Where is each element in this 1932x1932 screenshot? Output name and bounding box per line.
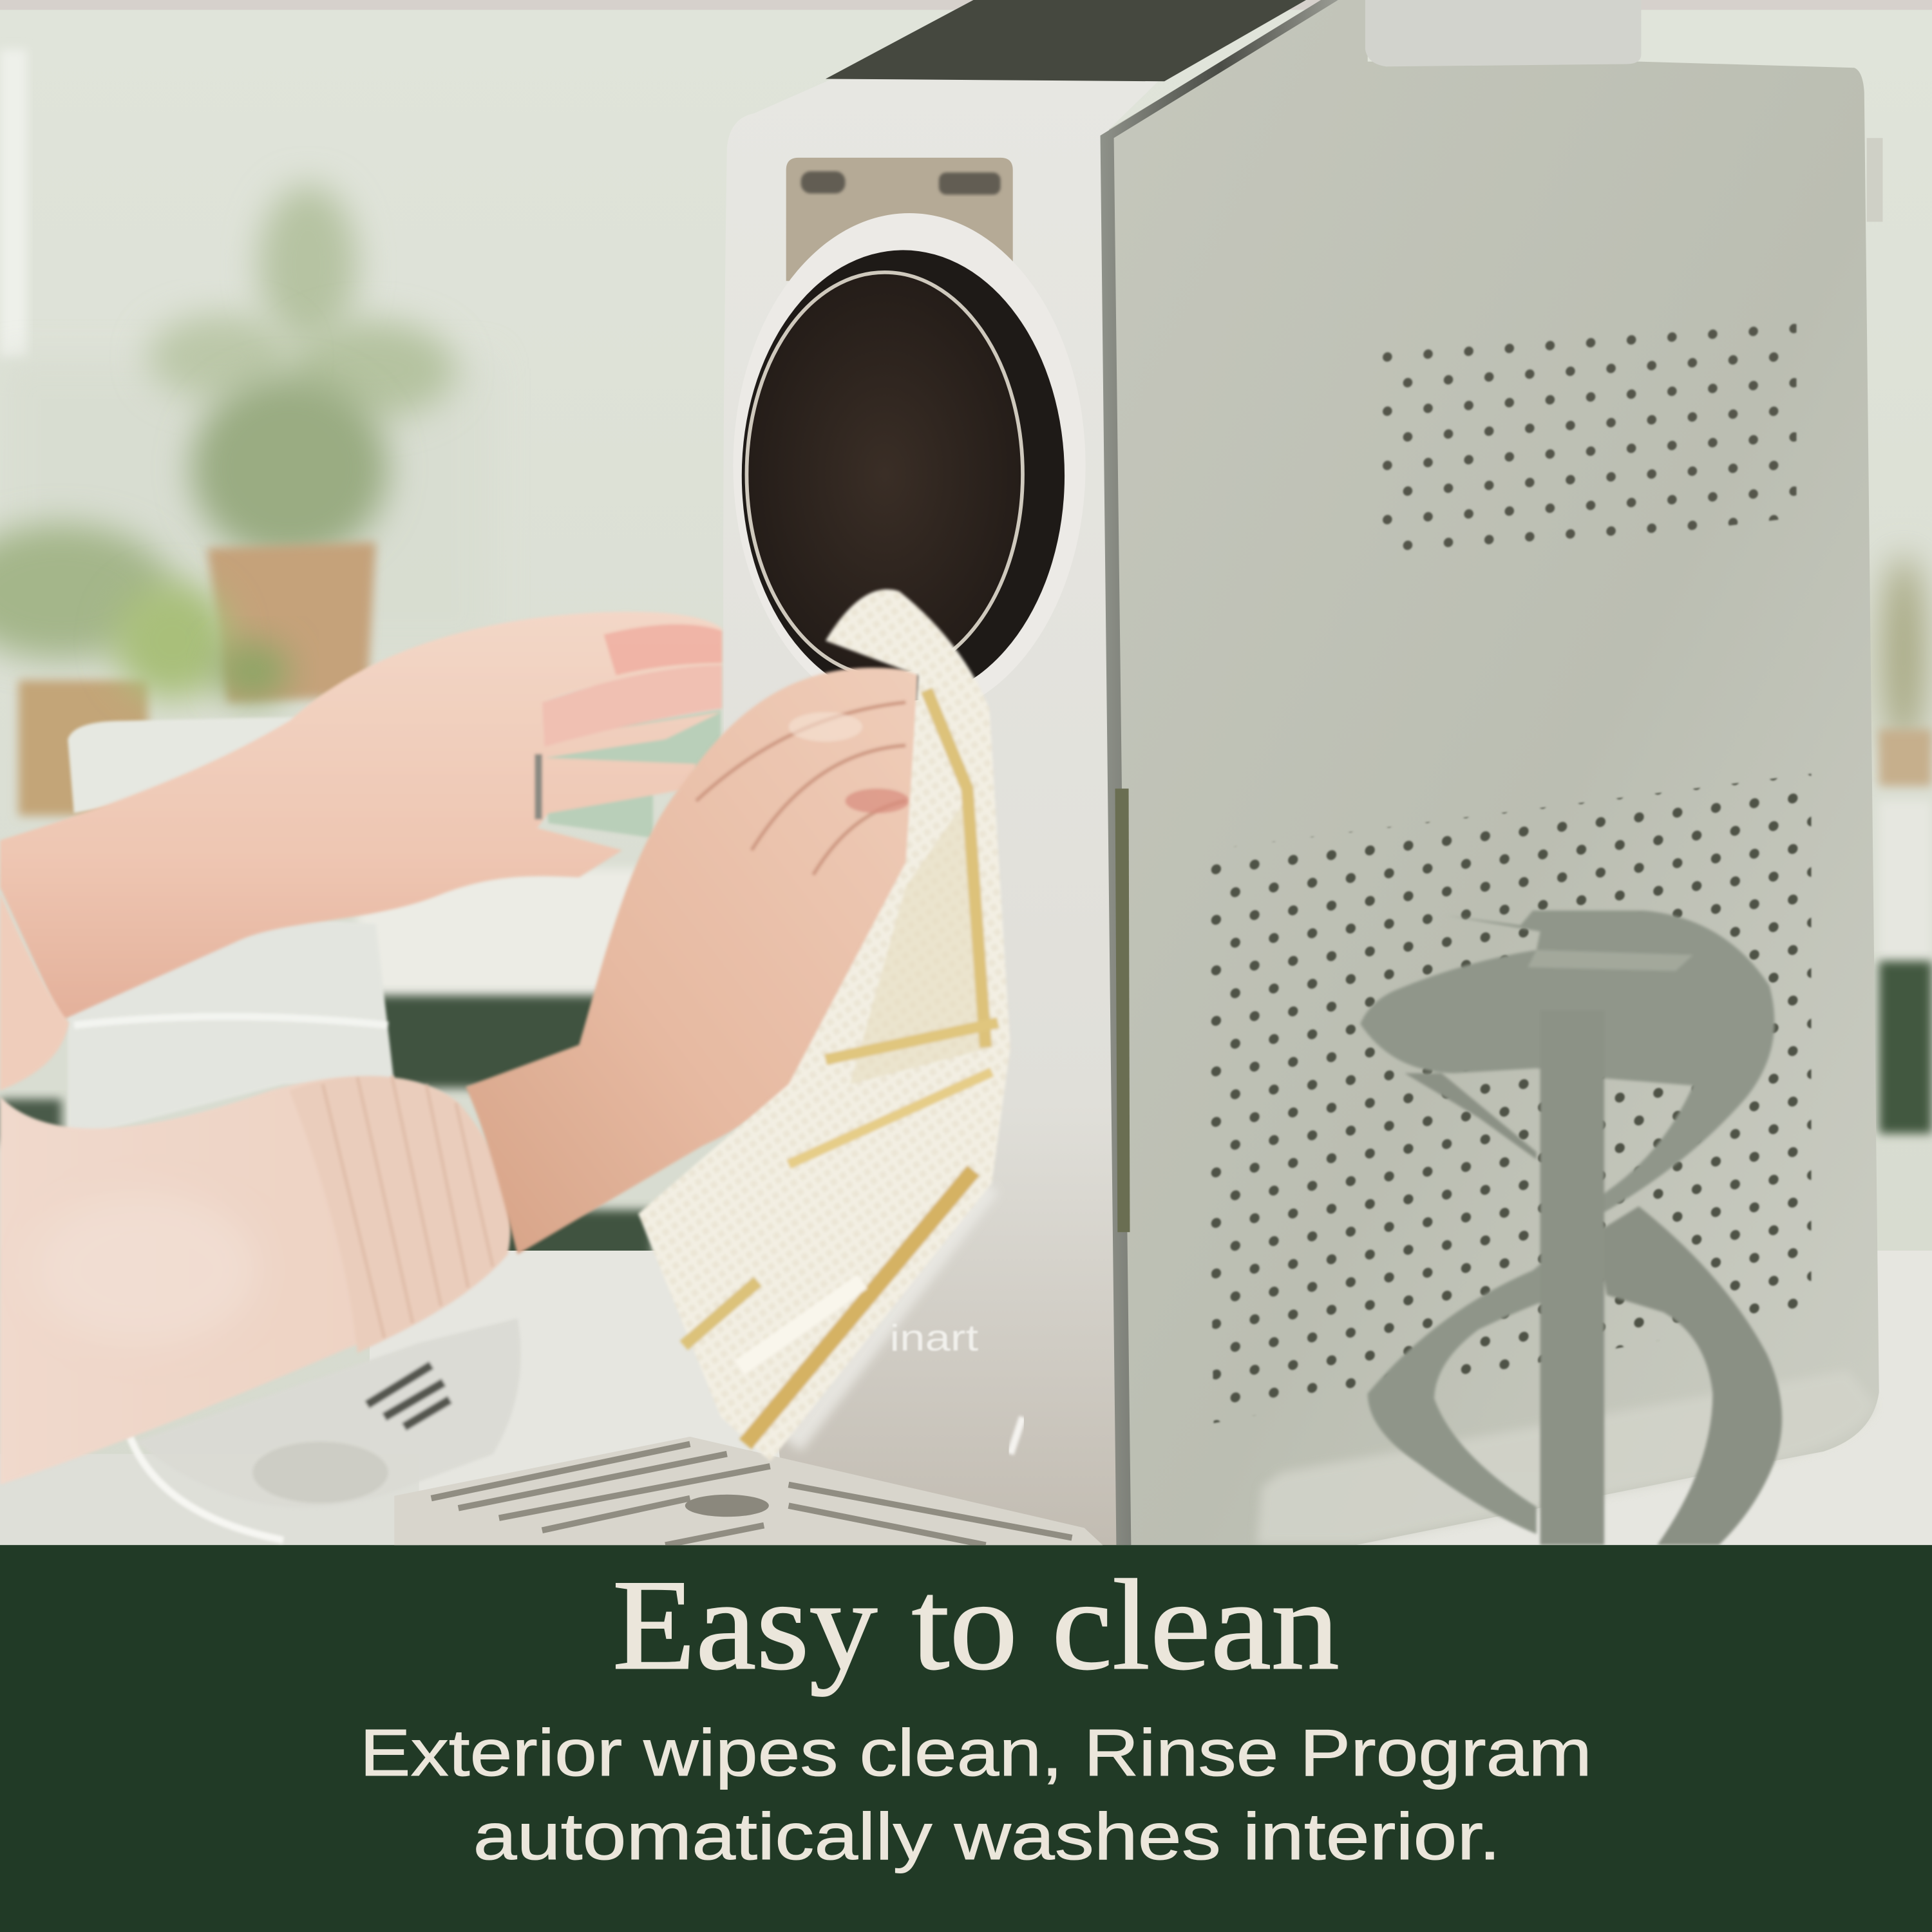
blurred potted plants <box>0 185 1932 816</box>
appliance side panel <box>1109 0 1882 1545</box>
kneading paddle <box>1360 911 1782 1545</box>
perforated vent upper <box>1378 323 1797 567</box>
lid top <box>1365 0 1641 66</box>
upper blade <box>1360 911 1774 1248</box>
title: Easy to clean <box>612 1554 1340 1697</box>
control display <box>786 158 1013 281</box>
lower ribbon right <box>1597 1206 1782 1545</box>
caption band <box>0 1545 1932 1932</box>
back sleeve cuff <box>0 893 69 1090</box>
ribbed cuff <box>290 1076 511 1353</box>
appliance front panel <box>394 0 1338 1545</box>
countertops and cabinets <box>0 801 1932 1546</box>
front panel highlights <box>1010 1417 1023 1454</box>
lower ribbon left <box>1368 1214 1602 1534</box>
ring glint <box>536 754 540 819</box>
thin spike <box>1405 1073 1537 1159</box>
front hand and forearm <box>466 668 918 1255</box>
forearm and palm <box>0 612 722 1020</box>
pink fingertips <box>604 624 722 675</box>
glass jar and pitcher <box>68 717 520 1540</box>
description text: automatically washes interior. <box>473 1799 1501 1873</box>
description text <box>360 1715 1592 1873</box>
back hand and forearm <box>0 612 722 1020</box>
kitchen background <box>0 0 1932 1545</box>
finger creases and nail <box>696 703 905 875</box>
top plate highlight <box>1528 950 1693 971</box>
central shaft <box>1540 1010 1604 1545</box>
front sweater sleeve <box>0 1075 511 1484</box>
middle finger <box>542 665 722 746</box>
dark opening <box>742 250 1065 701</box>
towel <box>638 589 1010 1461</box>
white collar ring <box>733 213 1086 718</box>
perforated vent lower <box>1205 774 1811 1423</box>
drip tray <box>394 1437 1103 1545</box>
description text: Exterior wipes clean, Rinse Program <box>360 1715 1592 1790</box>
green gaps between fingers <box>542 710 721 838</box>
brand logo fragment: inart <box>889 1318 978 1359</box>
inner lens <box>746 272 1023 676</box>
